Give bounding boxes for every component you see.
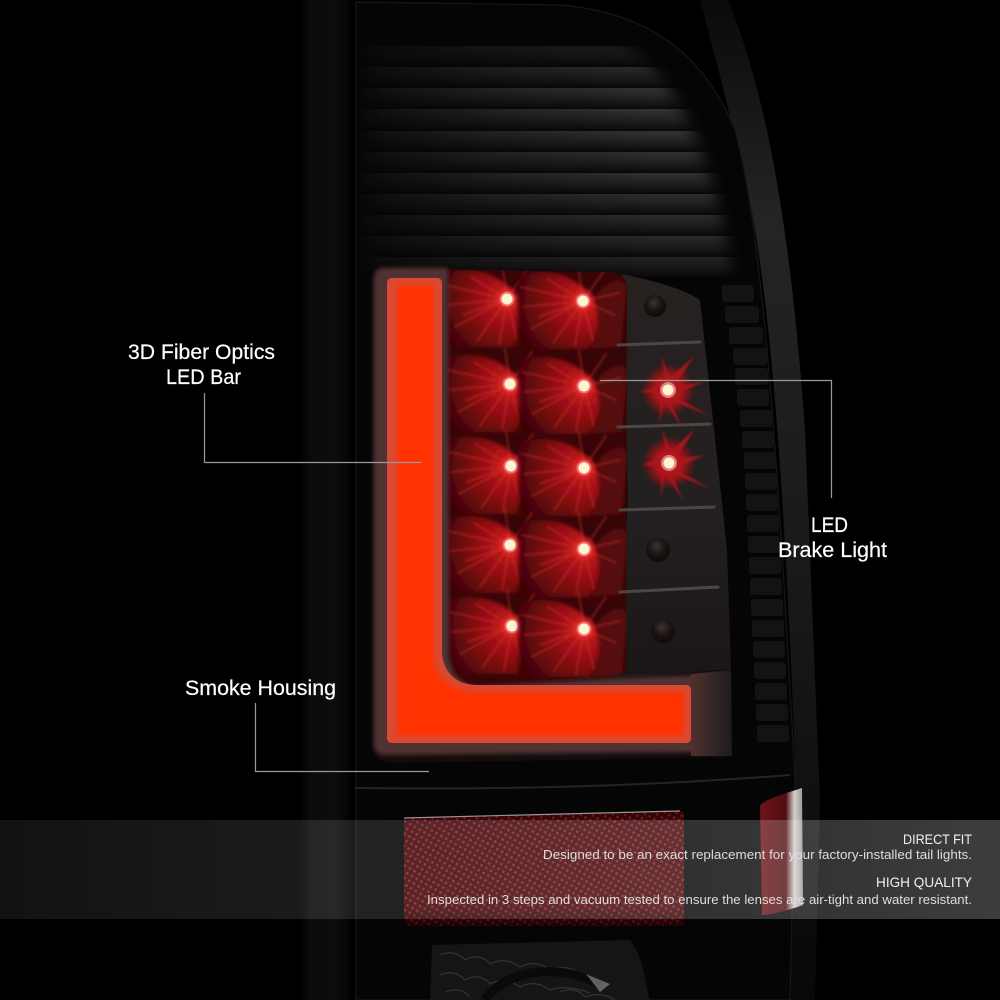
housing: right edge highlight: [700, 0, 820, 1000]
housing: lens body: [356, 2, 795, 1000]
translucent feature band: [0, 820, 1000, 919]
lamp: frame right fade: [691, 670, 732, 756]
lamp assembly: [372, 263, 732, 763]
callout: LED Brake Light: [600, 380, 887, 562]
housing: side ribs: [722, 285, 789, 742]
housing: lower trim line: [355, 775, 790, 788]
lamp: knobs: [644, 295, 675, 643]
tail light housing: [300, 0, 820, 1000]
bottom scaled lens: [430, 940, 650, 1000]
lamp: LED brake stars: [640, 356, 711, 501]
housing: left flange: [300, 0, 350, 1000]
callout: LED Brake Light: LED: [811, 514, 848, 537]
3D fiber optic LED bar: [387, 278, 691, 743]
lamp: panel ridges: [618, 342, 718, 592]
feature text: [427, 831, 973, 907]
callout: 3D Fiber Optics LED Bar: 3D Fiber Optics: [128, 341, 275, 364]
feature text: Inspected in 3 steps and vacuum tested to ensure the lenses are air-tight and water resistant.: [427, 892, 972, 907]
callout: Smoke Housing: [185, 677, 429, 772]
lamp: smoked grey panel: [616, 274, 731, 678]
feature text: DIRECT FIT: [903, 831, 972, 847]
callout: 3D Fiber Optics LED Bar: [128, 341, 421, 462]
main reflector: [404, 811, 684, 926]
lamp: bar halo: [374, 268, 702, 755]
callout: LED Brake Light: Brake Light: [778, 539, 887, 562]
lamp: red lens: [442, 263, 629, 690]
callout: 3D Fiber Optics LED Bar: LED Bar: [166, 366, 241, 389]
callout: Smoke Housing: Smoke Housing: [185, 677, 336, 700]
lamp: outer frame: [372, 266, 732, 763]
feature text: Designed to be an exact replacement for your factory-installed tail lights.: [543, 847, 972, 862]
feature text: HIGH QUALITY: [876, 874, 973, 890]
side reflector: [760, 788, 803, 915]
lower reflector section: [404, 788, 803, 1000]
housing: horizontal ribs: [374, 46, 734, 274]
